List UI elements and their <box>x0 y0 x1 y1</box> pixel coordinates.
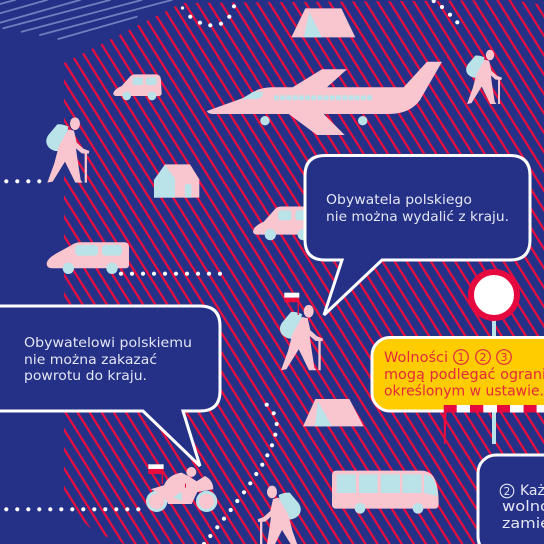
yellow notice: Wolności <box>384 350 448 366</box>
icon: house <box>154 164 199 198</box>
icon: hiker top right <box>466 50 502 104</box>
yellow notice: 3 <box>500 351 508 364</box>
icon: airplane <box>207 62 442 135</box>
top-left pale lines <box>0 0 172 39</box>
dotted route: top right <box>432 0 459 24</box>
icon: motorcycle with flag <box>146 464 217 512</box>
barrier stripes <box>444 405 544 412</box>
info panel: bottom right: wolno <box>502 499 544 515</box>
speech bubble: left: powrotu do kraju. <box>24 368 147 384</box>
icon: bus <box>332 471 439 514</box>
yellow notice <box>372 338 544 411</box>
speech bubble: left: nie można zakazać <box>24 352 157 368</box>
icon: car behind bubble <box>253 206 316 240</box>
icon: tent lower <box>303 399 364 426</box>
info panel: bottom right <box>478 455 544 544</box>
dotted route: to first walker <box>4 179 41 183</box>
icon: hiker with flag <box>280 293 323 370</box>
speech bubble: right: Obywatela polskiego <box>326 192 472 208</box>
sign: pole lower <box>492 412 496 444</box>
yellow notice: określonym w ustawie. <box>384 384 544 400</box>
dotted route: top arc <box>181 4 236 27</box>
yellow notice: mogą podlegać ograni <box>384 367 544 383</box>
icon: tent top <box>291 8 355 37</box>
dotted route: curve bottom centre <box>202 403 279 544</box>
dotted route: to motorcycle <box>4 507 140 511</box>
yellow notice: 2 <box>480 351 486 364</box>
barrier leg <box>444 412 446 444</box>
speech bubble: left <box>0 306 220 466</box>
speech bubble: right: nie można wydalić z kraju. <box>326 209 509 225</box>
icon: car top <box>113 74 162 100</box>
icon: van <box>47 242 129 274</box>
info panel: bottom right: 2 <box>504 486 510 498</box>
dotted route: from van <box>119 272 222 276</box>
info panel: bottom right: zamie <box>502 516 544 532</box>
yellow notice: 1 <box>458 351 464 364</box>
icon: hiker bottom <box>258 486 301 544</box>
icon: hiker left <box>46 117 89 183</box>
speech bubble: left: Obywatelowi polskiemu <box>24 335 192 351</box>
sign: round no-entry <box>471 272 517 346</box>
speech bubble: right <box>305 156 530 315</box>
